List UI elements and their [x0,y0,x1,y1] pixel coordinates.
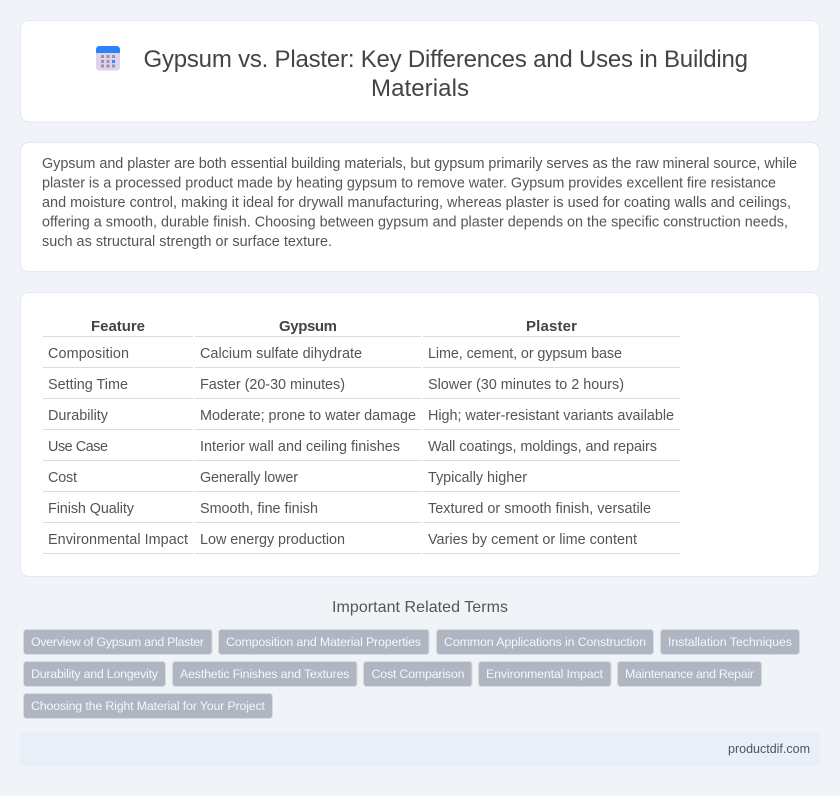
text block: introduction: Gypsum and plaster are both essential building materials, but gypsum primarily serves as the raw mineral source, while [42,156,797,172]
row: setting time: Faster (20-30 minutes) [200,377,345,393]
row: environmental impact: Low energy production [200,532,345,548]
title: Materials [371,75,469,102]
row: setting time [48,377,624,393]
row: composition [48,346,622,362]
row: finish quality: Textured or smooth finish, versatile [428,501,651,517]
tag: durability: Durability and Longevity [31,667,159,681]
row: finish quality: Finish Quality [48,501,135,517]
row: use case: Wall coatings, moldings, and repairs [428,439,657,455]
tag: cost: Cost Comparison [372,667,465,681]
icon: calendar [96,46,120,70]
row: setting time: Slower (30 minutes to 2 hours) [428,377,624,393]
row: finish quality [48,501,651,517]
text block: introduction: plaster is a processed product made by heating gypsum to remove water. Gypsum provides excellent fire resistance [42,176,776,192]
row: environmental impact: Environmental Impact [48,532,188,548]
row: composition: Calcium sulfate dihydrate [200,346,362,362]
tag: aesthetic: Aesthetic Finishes and Textures [180,667,350,681]
tag: composition: Composition and Material Properties [226,635,421,649]
related terms tags [24,630,800,718]
tag: cost [364,662,472,686]
text block: introduction [42,156,797,250]
heading: important related terms: Important Related Terms [332,599,508,616]
row: durability [48,408,674,424]
panel: comparison table [20,292,820,576]
footer [20,732,820,766]
row: cost: Typically higher [428,470,527,486]
table header: Gypsum [279,318,337,335]
tag: composition [218,630,429,654]
panel: header [20,20,820,122]
tag: maintenance: Maintenance and Repair [625,667,754,681]
tag: overview: Overview of Gypsum and Plaster [31,635,204,649]
row: cost: Cost [48,470,77,486]
table header [91,318,577,335]
table rules [43,336,680,554]
table header: Feature [91,318,145,335]
row: durability: Durability [48,408,109,424]
tag: choosing [24,694,272,718]
row: environmental impact [48,532,637,548]
row: finish quality: Smooth, fine finish [200,501,318,517]
tag: aesthetic [172,662,357,686]
title [144,46,748,102]
tag: applications: Common Applications in Construction [444,635,646,649]
tag: choosing: Choosing the Right Material for Your Project [31,699,266,713]
row: use case [48,439,657,455]
footer: productdif.com [728,742,810,756]
tag: installation [660,630,800,654]
row: durability: High; water-resistant variants available [428,408,674,424]
row: environmental impact: Varies by cement or lime content [428,532,637,548]
row: setting time: Setting Time [48,377,128,393]
panel: introduction [20,142,820,272]
tag: durability [24,662,166,686]
text block: introduction: offering a smooth, durable finish. Choosing between gypsum and plaster depends on the specific construction needs, [42,214,788,230]
tag: environmental: Environmental Impact [486,667,604,681]
tag: overview [24,630,212,654]
row: composition: Composition [48,346,129,362]
tag: applications [436,630,654,654]
row: composition: Lime, cement, or gypsum base [428,346,622,362]
row: use case: Use Case [48,439,108,455]
row: cost [48,470,527,486]
table header: Plaster [526,318,577,335]
row: use case: Interior wall and ceiling finishes [200,439,400,455]
tag: maintenance [618,662,762,686]
text block: introduction: such as structural strength or surface texture. [42,234,332,250]
text block: introduction: and moisture control, making it ideal for drywall manufacturing, whereas plaster is used for coating walls and ceilings, [42,195,791,211]
tag: environmental [478,662,611,686]
title: Gypsum vs. Plaster: Key Differences and Uses in Building [144,46,748,73]
row: cost: Generally lower [200,470,298,486]
tag: installation: Installation Techniques [668,635,792,649]
row: durability: Moderate; prone to water damage [200,408,416,424]
